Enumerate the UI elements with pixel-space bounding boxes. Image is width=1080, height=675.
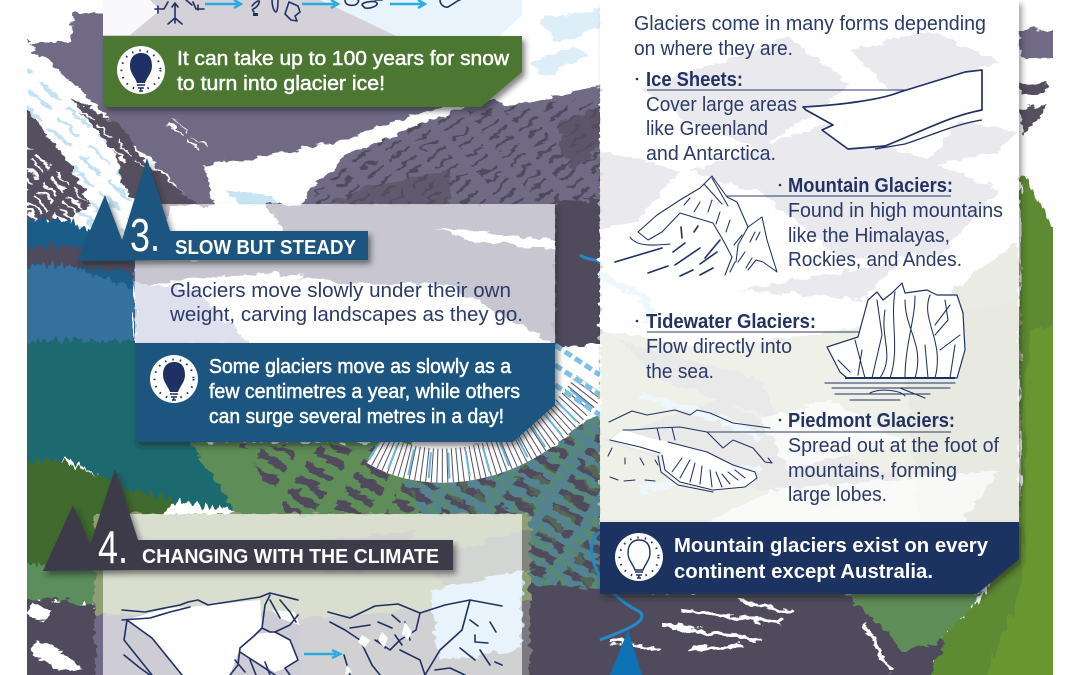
icon: mountain glacier xyxy=(615,176,777,276)
heading badge: step 4: 4. xyxy=(98,521,128,573)
callout text: It can take up to 100 years for snow xyxy=(177,48,510,70)
icon: piedmont glacier xyxy=(608,410,772,492)
callout text: Mountain glaciers exist on every xyxy=(674,535,989,557)
intro text: on where they are. xyxy=(634,38,793,60)
text: piedmont glaciers: mountains, forming xyxy=(788,460,957,482)
panel: step 3 slow but steady xyxy=(135,204,555,344)
icon: ice sheet xyxy=(803,70,982,149)
icon: tidewater glacier xyxy=(825,283,965,400)
text: ice sheets: Cover large areas xyxy=(646,94,797,116)
callout: mountain glaciers on every continent xyxy=(600,522,1019,594)
callout text: continent except Australia. xyxy=(674,561,933,583)
body text: weight, carving landscapes as they go. xyxy=(169,304,523,326)
icon: light bulb xyxy=(150,355,198,403)
text: mountain glaciers: Rockies, and Andes. xyxy=(788,249,962,271)
text: tidewater glaciers: the sea. xyxy=(646,361,714,383)
heading badge: step 3: 3. xyxy=(130,209,160,261)
callout: glacier speed fact xyxy=(135,343,555,442)
text: tidewater glaciers: Tidewater Glaciers: xyxy=(646,311,816,333)
callout text: Some glaciers move as slowly as a xyxy=(209,356,512,378)
bright snow streaks xyxy=(610,600,890,670)
text: tidewater glaciers xyxy=(636,311,860,383)
panel: step 2 from snow to ice (cropped top) xyxy=(103,0,522,40)
callout: snow to ice fact xyxy=(103,36,522,107)
text: mountain glaciers xyxy=(727,175,1003,271)
arrow: step sequence 3 xyxy=(390,0,425,8)
text: piedmont glaciers xyxy=(706,410,999,506)
arrow: step sequence 1 xyxy=(205,0,241,8)
text: piedmont glaciers: Piedmont Glaciers: xyxy=(788,410,955,432)
arrow: climate change xyxy=(304,650,340,658)
text: ice sheets: Ice Sheets: xyxy=(646,69,743,91)
panel: types of glaciers xyxy=(600,0,1019,523)
glacier terminus streaks xyxy=(375,345,600,466)
intro text: Glaciers come in many forms depending xyxy=(634,13,986,35)
text: ice sheets xyxy=(636,69,912,165)
text: ice sheets: like Greenland xyxy=(646,118,768,140)
icon: light bulb xyxy=(615,533,663,581)
callout text: to turn into glacier ice! xyxy=(177,73,385,95)
text: piedmont glaciers: large lobes. xyxy=(788,484,887,506)
map: present extent xyxy=(328,600,502,675)
text: tidewater glaciers: Flow directly into xyxy=(646,336,792,358)
heading badge: step 5 (cropped) xyxy=(610,630,642,675)
text: mountain glaciers: like the Himalayas, xyxy=(788,225,950,247)
text: mountain glaciers: Found in high mountains xyxy=(788,200,1003,222)
body text: Glaciers move slowly under their own xyxy=(170,280,511,302)
river xyxy=(580,255,642,640)
map: ice age extent xyxy=(122,593,300,675)
icon: light bulb xyxy=(117,46,165,94)
heading badge: step 4: CHANGING WITH THE CLIMATE xyxy=(142,546,439,568)
text: piedmont glaciers: Spread out at the foot of xyxy=(788,435,999,457)
text: mountain glaciers: Mountain Glaciers: xyxy=(788,175,953,197)
text: ice sheets: and Antarctica. xyxy=(646,143,776,165)
icon: snow to ice sequence xyxy=(155,0,460,24)
callout text: can surge several metres in a day! xyxy=(209,406,504,428)
arrow: step sequence 2 xyxy=(302,0,338,8)
callout text: few centimetres a year, while others xyxy=(209,381,520,403)
heading badge: step 3: SLOW BUT STEADY xyxy=(175,237,357,259)
panel: step 4 changing with the climate xyxy=(103,514,522,675)
heading badge: step 4 xyxy=(43,469,453,573)
heading badge: step 3 xyxy=(77,158,368,261)
